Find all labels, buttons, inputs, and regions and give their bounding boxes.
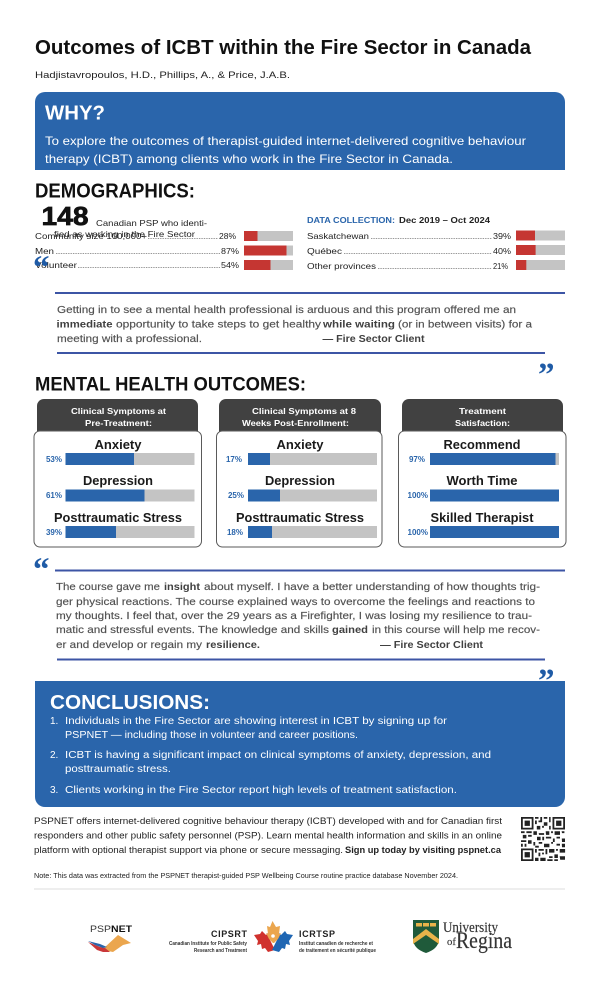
why text: therapy (ICBT) among clients who work in the Fire Sector in Canada. — [45, 152, 453, 166]
anxiety bar: 17% — [226, 455, 242, 464]
post-enrolment header: Clinical Symptoms at 8 — [252, 406, 356, 416]
anxiety bar: 53% — [46, 455, 62, 464]
quote 2: — Fire Sector Client — [380, 639, 484, 651]
demographics heading: DEMOGRAPHICS: — [35, 180, 195, 202]
quote 2: resilience. — [206, 639, 260, 651]
recommend bar: 97% — [409, 455, 425, 464]
why text: To explore the outcomes of therapist-guided internet-delivered cognitive behaviour — [45, 134, 526, 148]
quote 2: matic and stressful events. The knowledge and skills — [56, 624, 329, 636]
data collection dates — [307, 215, 490, 225]
pre-treatment header: Pre-Treatment: — [85, 418, 152, 428]
posttraumatic stress bar: 39% — [46, 528, 62, 537]
conclusion 2: posttraumatic stress. — [65, 764, 171, 775]
depression bar: Depression — [265, 474, 335, 488]
about pspnet text: responders and other public safety personnel (PSP). Learn mental health information and skills in an online — [34, 830, 502, 840]
CIPSRT text — [169, 929, 248, 954]
data collection dates: DATA COLLECTION: — [307, 215, 395, 225]
skilled therapist bar: 100% — [408, 528, 428, 537]
data note: Note: This data was extracted from the PSPNET therapist-guided PSP Wellbeing Course routine practice database November 2024. — [34, 871, 458, 880]
demographics bars right: Saskatchewan — [307, 231, 369, 241]
logo: PSPNET — [88, 924, 132, 952]
about pspnet text: Sign up today by visiting pspnet.ca — [345, 845, 502, 855]
why heading: WHY? — [45, 102, 105, 124]
mental health outcomes heading: MENTAL HEALTH OUTCOMES: — [35, 374, 306, 396]
conclusion 3: Clients working in the Fire Sector report high levels of treatment satisfaction. — [65, 785, 457, 796]
anxiety bar: Anxiety — [276, 438, 324, 452]
quote 1: — Fire Sector Client — [322, 333, 425, 345]
icon: opening quote 2: “ — [33, 552, 50, 588]
worth time bar: 100% — [408, 491, 428, 500]
posttraumatic stress bar: Posttraumatic Stress — [54, 511, 182, 525]
conclusion 2 — [50, 750, 491, 775]
quote 1: Getting in to see a mental health professional is arduous and this program offered me an — [57, 304, 516, 316]
depression bar — [228, 474, 377, 502]
quote 2: insight — [164, 581, 201, 593]
logo: CIPSRT / ICRTSP — [169, 921, 376, 954]
about pspnet text: platform with optional therapist support via phone or secure messaging. — [34, 845, 343, 855]
conclusion 3: 3. — [50, 785, 58, 796]
demographics bars right: Other provinces — [307, 261, 376, 271]
demographics bars right: 21% — [493, 261, 508, 271]
conclusion 1 — [50, 716, 448, 741]
demographics bars right — [307, 230, 565, 271]
conclusion 2: ICBT is having a significant impact on clinical symptoms of anxiety, depression, and — [65, 750, 491, 761]
CIPSRT text: Canadian Institute for Public Safety — [169, 941, 247, 947]
satisfaction header: Satisfaction: — [455, 418, 510, 428]
demographics bars left: 87% — [221, 246, 239, 256]
stat: 148 participants — [42, 203, 207, 239]
quote 1: opportunity to take steps to get healthy — [116, 318, 322, 330]
icon: QR code — [521, 817, 565, 861]
anxiety bar — [226, 438, 377, 465]
quote 2 — [55, 570, 565, 660]
skilled therapist bar: Skilled Therapist — [430, 511, 534, 525]
panel: treatment satisfaction — [398, 399, 566, 547]
about pspnet text: PSPNET offers internet-delivered cognitive behaviour therapy (ICBT) developed with and for Canadian first — [34, 816, 503, 826]
conclusion 2: 2. — [50, 750, 58, 761]
quote 1: (or in between visits) for a — [398, 318, 532, 330]
stat: 148 participants: 148 — [42, 203, 88, 231]
demographics bars right: Québec — [307, 246, 343, 256]
quote 2: in this course will help me recov- — [372, 624, 541, 636]
logo: University of Regina: of — [447, 936, 456, 948]
anxiety bar: Anxiety — [94, 438, 142, 452]
demographics bars left — [35, 231, 293, 270]
demographics bars left: Men — [35, 246, 54, 256]
panel: why — [35, 92, 565, 170]
quote 2: er and develop or regain my — [56, 639, 203, 651]
quote 1: immediate — [56, 318, 113, 330]
demographics bars left: 54% — [221, 260, 239, 270]
quote 1 — [55, 292, 565, 354]
quote 2: ger physical reactions. The course explained ways to overcome the feelings and reactions to — [56, 596, 535, 608]
logo: University of Regina — [413, 920, 512, 953]
depression bar: 61% — [46, 491, 62, 500]
recommend bar — [409, 438, 559, 465]
recommend bar: Recommend — [444, 438, 520, 452]
CIPSRT text: CIPSRT — [211, 929, 248, 939]
authors: Hadjistavropoulos, H.D., Phillips, A., & Price, J.A.B. — [35, 70, 290, 81]
quote 2: gained — [332, 624, 368, 636]
depression bar: 25% — [228, 491, 244, 500]
logo: PSPNET: PSPNET — [90, 924, 132, 935]
pre-treatment header — [71, 406, 166, 428]
logo: University of Regina: Regina — [456, 928, 512, 953]
stat: 148 participants: Canadian PSP who identi- — [96, 218, 207, 228]
ICRTSP text: de traitement en sécurité publique — [299, 948, 376, 954]
demographics bars right: 39% — [493, 231, 511, 241]
icon: closing quote 1: ” — [538, 357, 554, 393]
posttraumatic stress bar — [227, 511, 377, 538]
maple leaf emblem — [254, 921, 293, 952]
conclusion 1: 1. — [50, 716, 58, 727]
post-enrolment header: Weeks Post-Enrollment: — [242, 418, 349, 428]
icon: closing quote 2: ” — [538, 663, 554, 699]
conclusion 1: PSPNET — including those in volunteer and career positions. — [65, 730, 358, 741]
quote 1: while waiting — [322, 318, 395, 330]
icon: opening quote 1: “ — [33, 250, 50, 286]
posttraumatic stress bar — [46, 511, 194, 538]
demographics bars right: 40% — [493, 246, 511, 256]
stat: 148 participants: fied as working in the Fire Sector — [54, 229, 195, 239]
about pspnet text — [34, 816, 503, 855]
data collection dates: Dec 2019 – Oct 2024 — [399, 215, 490, 225]
demographics bars left: Volunteer — [35, 260, 77, 270]
ICRTSP text — [299, 929, 376, 954]
satisfaction header: Treatment — [459, 406, 506, 416]
anxiety bar — [46, 438, 194, 465]
worth time bar — [408, 474, 559, 502]
title: Outcomes of ICBT within the Fire Sector in Canada — [35, 37, 532, 59]
pre-treatment header: Clinical Symptoms at — [71, 406, 166, 416]
posttraumatic stress bar: 18% — [227, 528, 243, 537]
depression bar — [46, 474, 194, 502]
panel: pre-treatment symptoms — [34, 399, 202, 547]
panel: conclusions — [35, 681, 565, 807]
why text — [45, 134, 526, 166]
satisfaction header — [455, 406, 510, 428]
depression bar: Depression — [83, 474, 153, 488]
conclusions heading: CONCLUSIONS: — [50, 692, 210, 714]
logo: University of Regina: University — [443, 920, 498, 936]
ICRTSP text: Institut canadien de recherche et — [299, 941, 373, 947]
posttraumatic stress bar: Posttraumatic Stress — [236, 511, 364, 525]
skilled therapist bar — [408, 511, 559, 538]
demographics bars left: 28% — [219, 231, 236, 241]
quote 1: meeting with a professional. — [57, 333, 202, 345]
conclusion 1: Individuals in the Fire Sector are showing interest in ICBT by signing up for — [65, 716, 448, 727]
quote 2: my thoughts. I feel that, over the 29 years as a Firefighter, I was losing my resilience to trau- — [56, 610, 533, 622]
quote 2: The course gave me — [56, 581, 160, 593]
ICRTSP text: ICRTSP — [299, 929, 335, 939]
CIPSRT text: Research and Treatment — [194, 948, 247, 954]
demographics bars left: Community size 100,000+ — [35, 231, 147, 241]
post-enrolment header — [242, 406, 356, 428]
panel: post-enrolment symptoms — [216, 399, 382, 547]
worth time bar: Worth Time — [446, 474, 518, 488]
quote 2: about myself. I have a better understanding of how thoughts trig- — [204, 581, 541, 593]
